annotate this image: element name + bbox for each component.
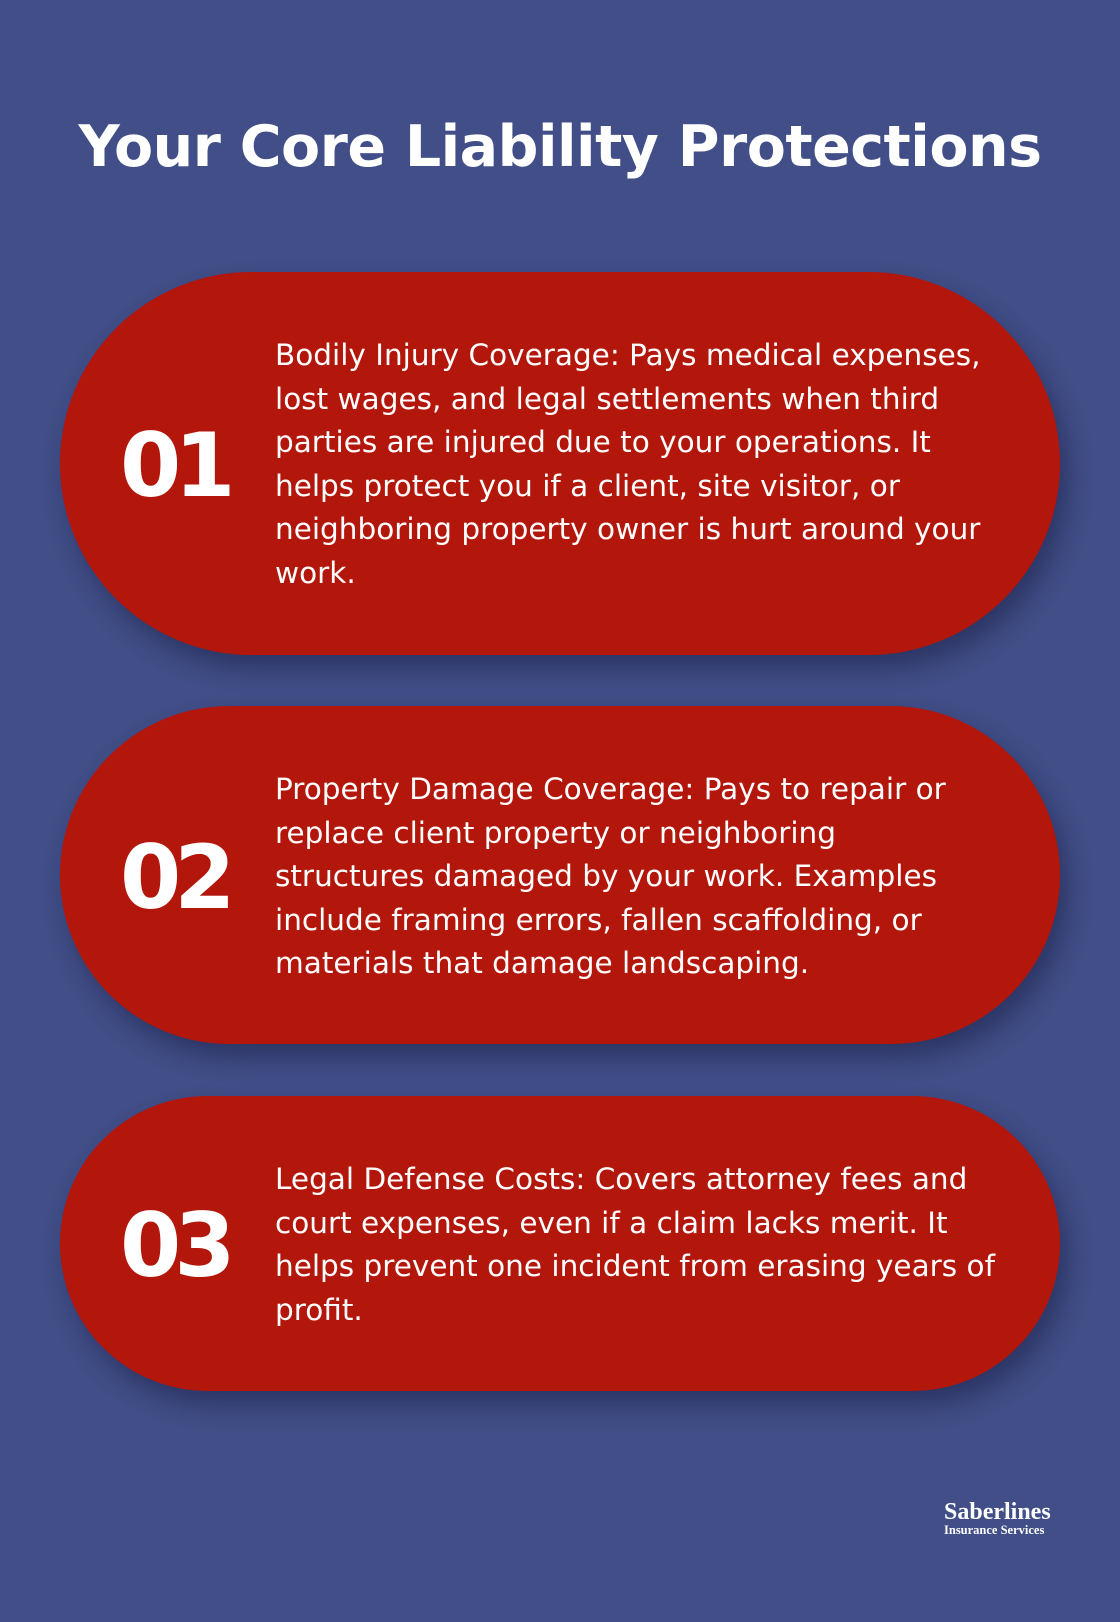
- text: legal defense: [275, 1162, 996, 1326]
- number 01: 01: [120, 414, 228, 517]
- text: bodily injury: helps protect you if a client, site visitor, or: [275, 468, 900, 502]
- logo: [944, 1499, 1051, 1537]
- text: bodily injury: neighboring property owner is hurt around your: [275, 512, 980, 546]
- text: bodily injury: work.: [275, 556, 356, 590]
- text: bodily injury: [275, 338, 980, 590]
- logo: Insurance Services: [944, 1523, 1044, 1537]
- panel: property damage: [60, 706, 1060, 1044]
- logo: Saberlines: [944, 1499, 1051, 1525]
- text: property damage: include framing errors, fallen scaffolding, or: [275, 902, 922, 936]
- text: legal defense: profit.: [275, 1292, 363, 1326]
- number 03: 03: [120, 1194, 228, 1297]
- text: bodily injury: parties are injured due to your operations. It: [275, 425, 931, 459]
- title: Your Core Liability Protections: [78, 114, 1042, 180]
- text: legal defense: helps prevent one incident from erasing years of: [275, 1249, 995, 1283]
- text: property damage: Property Damage Coverage: Pays to repair or: [275, 772, 946, 806]
- text: bodily injury: lost wages, and legal settlements when third: [275, 382, 939, 416]
- text: property damage: replace client property or neighboring: [275, 816, 836, 850]
- text: bodily injury: Bodily Injury Coverage: Pays medical expenses,: [275, 338, 980, 372]
- text: property damage: [275, 772, 946, 980]
- number 02: 02: [120, 826, 228, 929]
- text: legal defense: Legal Defense Costs: Covers attorney fees and: [275, 1162, 967, 1196]
- text: property damage: materials that damage landscaping.: [275, 946, 809, 980]
- text: legal defense: court expenses, even if a claim lacks merit. It: [275, 1206, 948, 1240]
- text: property damage: structures damaged by your work. Examples: [275, 859, 937, 893]
- panel: legal defense: [60, 1096, 1060, 1391]
- panel: bodily injury: [60, 272, 1060, 655]
